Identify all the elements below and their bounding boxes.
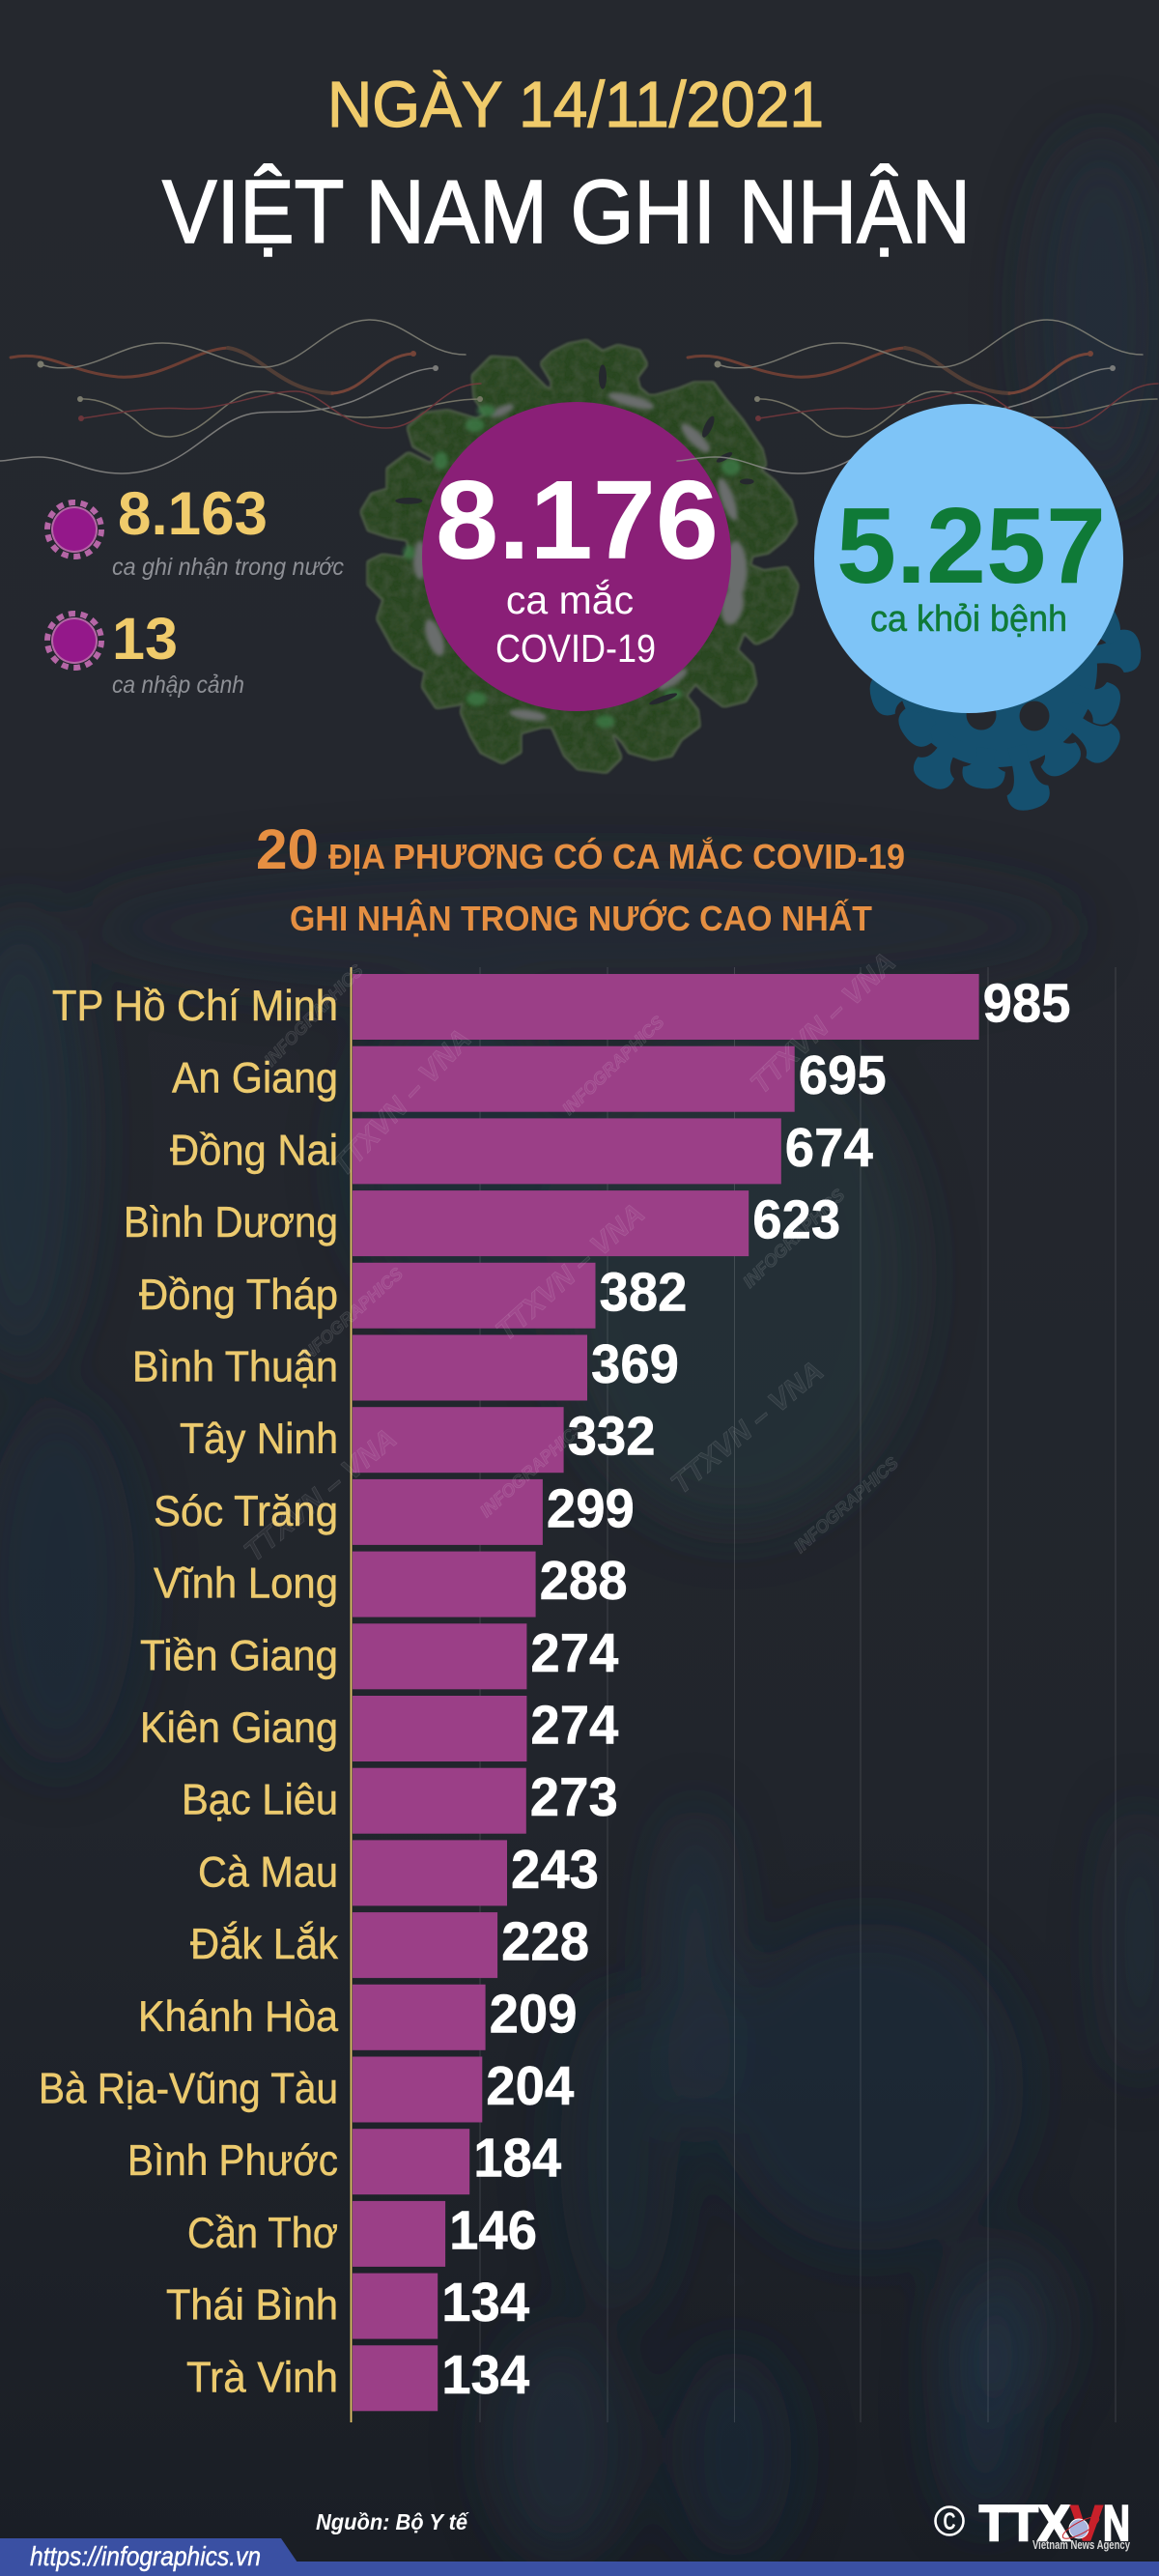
watermarks: INFOGRAPHICS: [790, 1453, 902, 1557]
row: Khánh Hòa: 209: [490, 1983, 578, 2045]
chart heading: [256, 818, 905, 938]
row: Bạc Liêu: Bạc Liêu: [182, 1777, 338, 1824]
row: Sóc Trăng: Sóc Trăng: [154, 1488, 338, 1535]
circle: total cases: [422, 402, 731, 711]
footer link: https://infographics.vn: [30, 2541, 261, 2571]
row: Vĩnh Long: Vĩnh Long: [154, 1560, 338, 1608]
row: Bình Dương: 623: [752, 1189, 840, 1251]
source note: Nguồn: Bộ Y tế: [316, 2509, 469, 2534]
row: Bình Thuận: [132, 1333, 679, 1401]
row: Sóc Trăng: [154, 1477, 635, 1545]
watermarks: INFOGRAPHICS: [295, 1264, 407, 1367]
row: Cần Thơ: Cần Thơ: [187, 2210, 338, 2257]
row: TP Hồ Chí Minh: TP Hồ Chí Minh: [52, 983, 338, 1030]
row: Đồng Nai: 674: [785, 1117, 873, 1179]
title: date: NGÀY 14/11/2021: [327, 69, 824, 141]
row: Bình Dương: Bình Dương: [124, 1199, 338, 1246]
label: imported: ca nhập cảnh: [112, 672, 244, 699]
stat: domestic cases: [47, 480, 344, 581]
chart heading: GHI NHẬN TRONG NƯỚC CAO NHẤT: [290, 898, 872, 938]
label: domestic: ca ghi nhận trong nước: [112, 554, 344, 581]
logo: TTXVN: N: [1103, 2496, 1130, 2552]
illustration: green coronavirus behind total cases: [364, 343, 795, 770]
row: Bình Thuận: 369: [591, 1333, 679, 1395]
decorative wave lines left: [0, 320, 483, 473]
watermarks: INFOGRAPHICS: [739, 1186, 848, 1292]
watermarks: [239, 947, 902, 1568]
row: TP Hồ Chí Minh: 985: [983, 972, 1071, 1034]
watermarks: INFOGRAPHICS: [261, 960, 367, 1070]
label: ca khỏi bệnh: ca khỏi bệnh: [870, 599, 1067, 640]
row: Cần Thơ: [187, 2199, 537, 2267]
row: Đồng Tháp: [139, 1261, 688, 1329]
row: Vĩnh Long: [154, 1550, 628, 1617]
row: Bình Thuận: Bình Thuận: [132, 1343, 338, 1391]
row: Bình Phước: [127, 2128, 561, 2194]
row: Đồng Tháp: Đồng Tháp: [139, 1272, 338, 1319]
row: Tây Ninh: 332: [568, 1406, 656, 1468]
logo: TTXVN: TTX: [979, 2496, 1070, 2552]
row: Vĩnh Long: 288: [540, 1550, 628, 1612]
footer bar: [0, 2538, 1159, 2576]
row: Tiền Giang: 274: [530, 1622, 619, 1684]
logo: TTXVN: V: [1070, 2496, 1103, 2552]
row: Thái Bình: Thái Bình: [166, 2282, 338, 2330]
label: ca mắc: ca mắc: [506, 578, 634, 622]
chart heading: ĐỊA PHƯƠNG CÓ CA MẮC COVID-19: [328, 836, 905, 876]
watermarks: TTXVN – VNA: [490, 1197, 651, 1347]
row: Đồng Nai: Đồng Nai: [170, 1127, 338, 1174]
row: Bình Dương: [124, 1189, 840, 1256]
icon: blue virus behind recovered cases: [866, 566, 1144, 815]
row: Kiên Giang: Kiên Giang: [140, 1704, 338, 1752]
row: Cần Thơ: 146: [449, 2199, 537, 2261]
row: Tiền Giang: Tiền Giang: [140, 1632, 338, 1679]
logo: TTXVN: [935, 2496, 1131, 2552]
row: Thái Bình: [166, 2272, 529, 2339]
decorative wave lines right: [677, 320, 1158, 473]
number: 8.163: 8.163: [118, 480, 268, 548]
stat: imported cases: [47, 606, 244, 699]
row: Trà Vinh: [186, 2344, 529, 2411]
row: Bà Rịa-Vũng Tàu: [39, 2055, 575, 2122]
number: 13: 13: [112, 606, 178, 672]
watermarks: TTXVN – VNA: [665, 1355, 830, 1501]
row: An Giang: An Giang: [172, 1055, 338, 1102]
row: Tiền Giang: [140, 1622, 619, 1689]
row: Cà Mau: [198, 1839, 599, 1905]
row: Khánh Hòa: [138, 1983, 578, 2050]
icon: small virus: [47, 614, 101, 668]
row: Trà Vinh: 134: [441, 2344, 529, 2406]
row: Sóc Trăng: 299: [547, 1477, 635, 1539]
icon: small virus: [47, 502, 101, 557]
title: main heading: VIỆT NAM GHI NHẬN: [162, 161, 971, 262]
number: total cases: 8.176: [436, 457, 719, 583]
row: Bình Phước: 184: [473, 2128, 561, 2190]
bar chart: [39, 967, 1116, 2422]
row: An Giang: [172, 1045, 887, 1112]
row: Trà Vinh: Trà Vinh: [186, 2354, 338, 2401]
row: TP Hồ Chí Minh: [52, 972, 1071, 1040]
row: Đồng Tháp: 382: [599, 1261, 688, 1323]
row: Khánh Hòa: Khánh Hòa: [138, 1993, 338, 2041]
row: Đắk Lắk: [190, 1911, 589, 1978]
row: Bạc Liêu: 273: [530, 1766, 618, 1828]
logo: TTXVN: C: [943, 2508, 956, 2535]
row: Bà Rịa-Vũng Tàu: 204: [486, 2055, 575, 2117]
row: Bạc Liêu: [182, 1766, 618, 1834]
row: Kiên Giang: [140, 1695, 619, 1761]
watermarks: TTXVN – VNA: [325, 1023, 478, 1183]
row: Bình Phước: Bình Phước: [127, 2137, 338, 2185]
row: Đắk Lắk: Đắk Lắk: [190, 1921, 339, 1968]
watermarks: TTXVN – VNA: [239, 1422, 403, 1568]
row: Kiên Giang: 274: [530, 1695, 619, 1757]
row: An Giang: 695: [799, 1045, 887, 1106]
chart heading: 20: [256, 818, 319, 881]
number: recovered cases: 5.257: [836, 486, 1106, 606]
row: Tây Ninh: [180, 1406, 656, 1473]
watermarks: INFOGRAPHICS: [476, 1417, 588, 1521]
row: Cà Mau: 243: [511, 1839, 599, 1901]
watermarks: TTXVN – VNA: [745, 947, 902, 1101]
label: COVID-19: COVID-19: [495, 626, 656, 671]
circle: recovered cases: [814, 404, 1123, 713]
row: Đồng Nai: [170, 1117, 873, 1184]
row: Thái Bình: 134: [441, 2272, 529, 2333]
row: Bà Rịa-Vũng Tàu: Bà Rịa-Vũng Tàu: [39, 2066, 338, 2112]
row: Tây Ninh: Tây Ninh: [180, 1416, 338, 1463]
watermarks: INFOGRAPHICS: [558, 1013, 667, 1119]
row: Đắk Lắk: 228: [501, 1911, 589, 1973]
row: Cà Mau: Cà Mau: [198, 1848, 338, 1896]
